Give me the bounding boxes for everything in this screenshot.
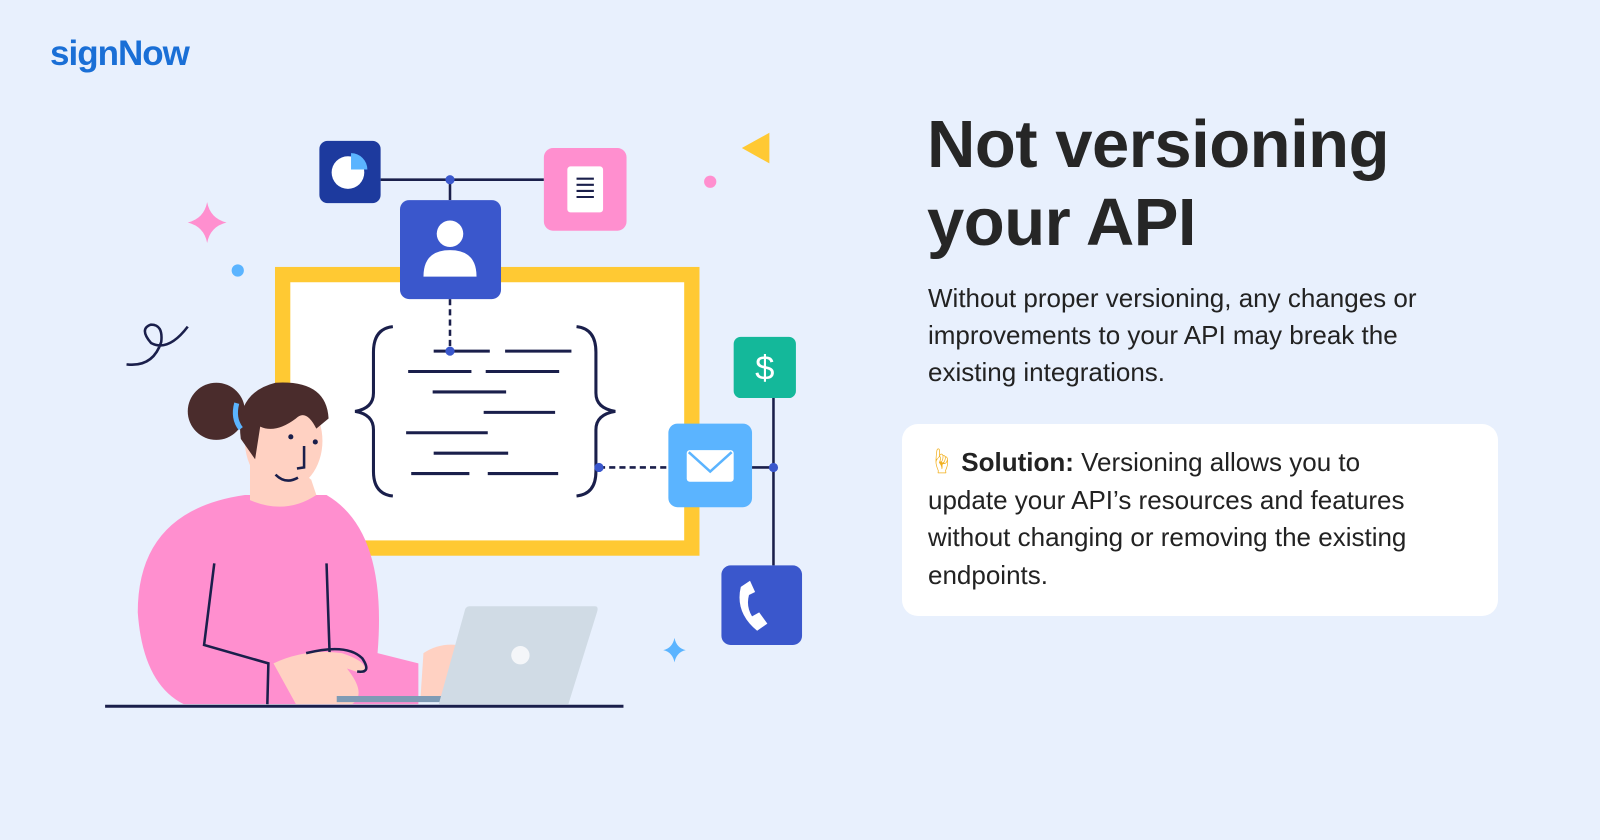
icon: user — [400, 200, 501, 299]
connectors — [381, 175, 778, 565]
icon: pie chart — [319, 141, 381, 203]
solution text: endpoints. — [928, 560, 1048, 590]
solution callout — [902, 424, 1498, 616]
icon: envelope — [668, 424, 752, 507]
description paragraph: Without proper versioning, any changes or improvements to your API may break the existing integrations. — [928, 283, 1416, 387]
icon: phone — [721, 565, 802, 645]
logo: signNow — [50, 34, 189, 73]
code frame — [283, 275, 692, 548]
decorations — [127, 133, 769, 662]
woman at laptop — [105, 383, 623, 706]
title: Not versioning — [927, 107, 1389, 182]
icon: dollar — [734, 337, 796, 398]
icon: dollar: $ — [755, 350, 774, 388]
solution text: update your API’s resources and features — [928, 484, 1404, 514]
title — [927, 107, 1389, 260]
solution text — [928, 447, 1406, 590]
title: your API — [927, 185, 1196, 260]
solution text: without changing or removing the existing — [928, 522, 1406, 552]
solution text: ☝ Solution: Versioning allows you to — [928, 447, 1360, 477]
icon: document — [544, 148, 627, 231]
